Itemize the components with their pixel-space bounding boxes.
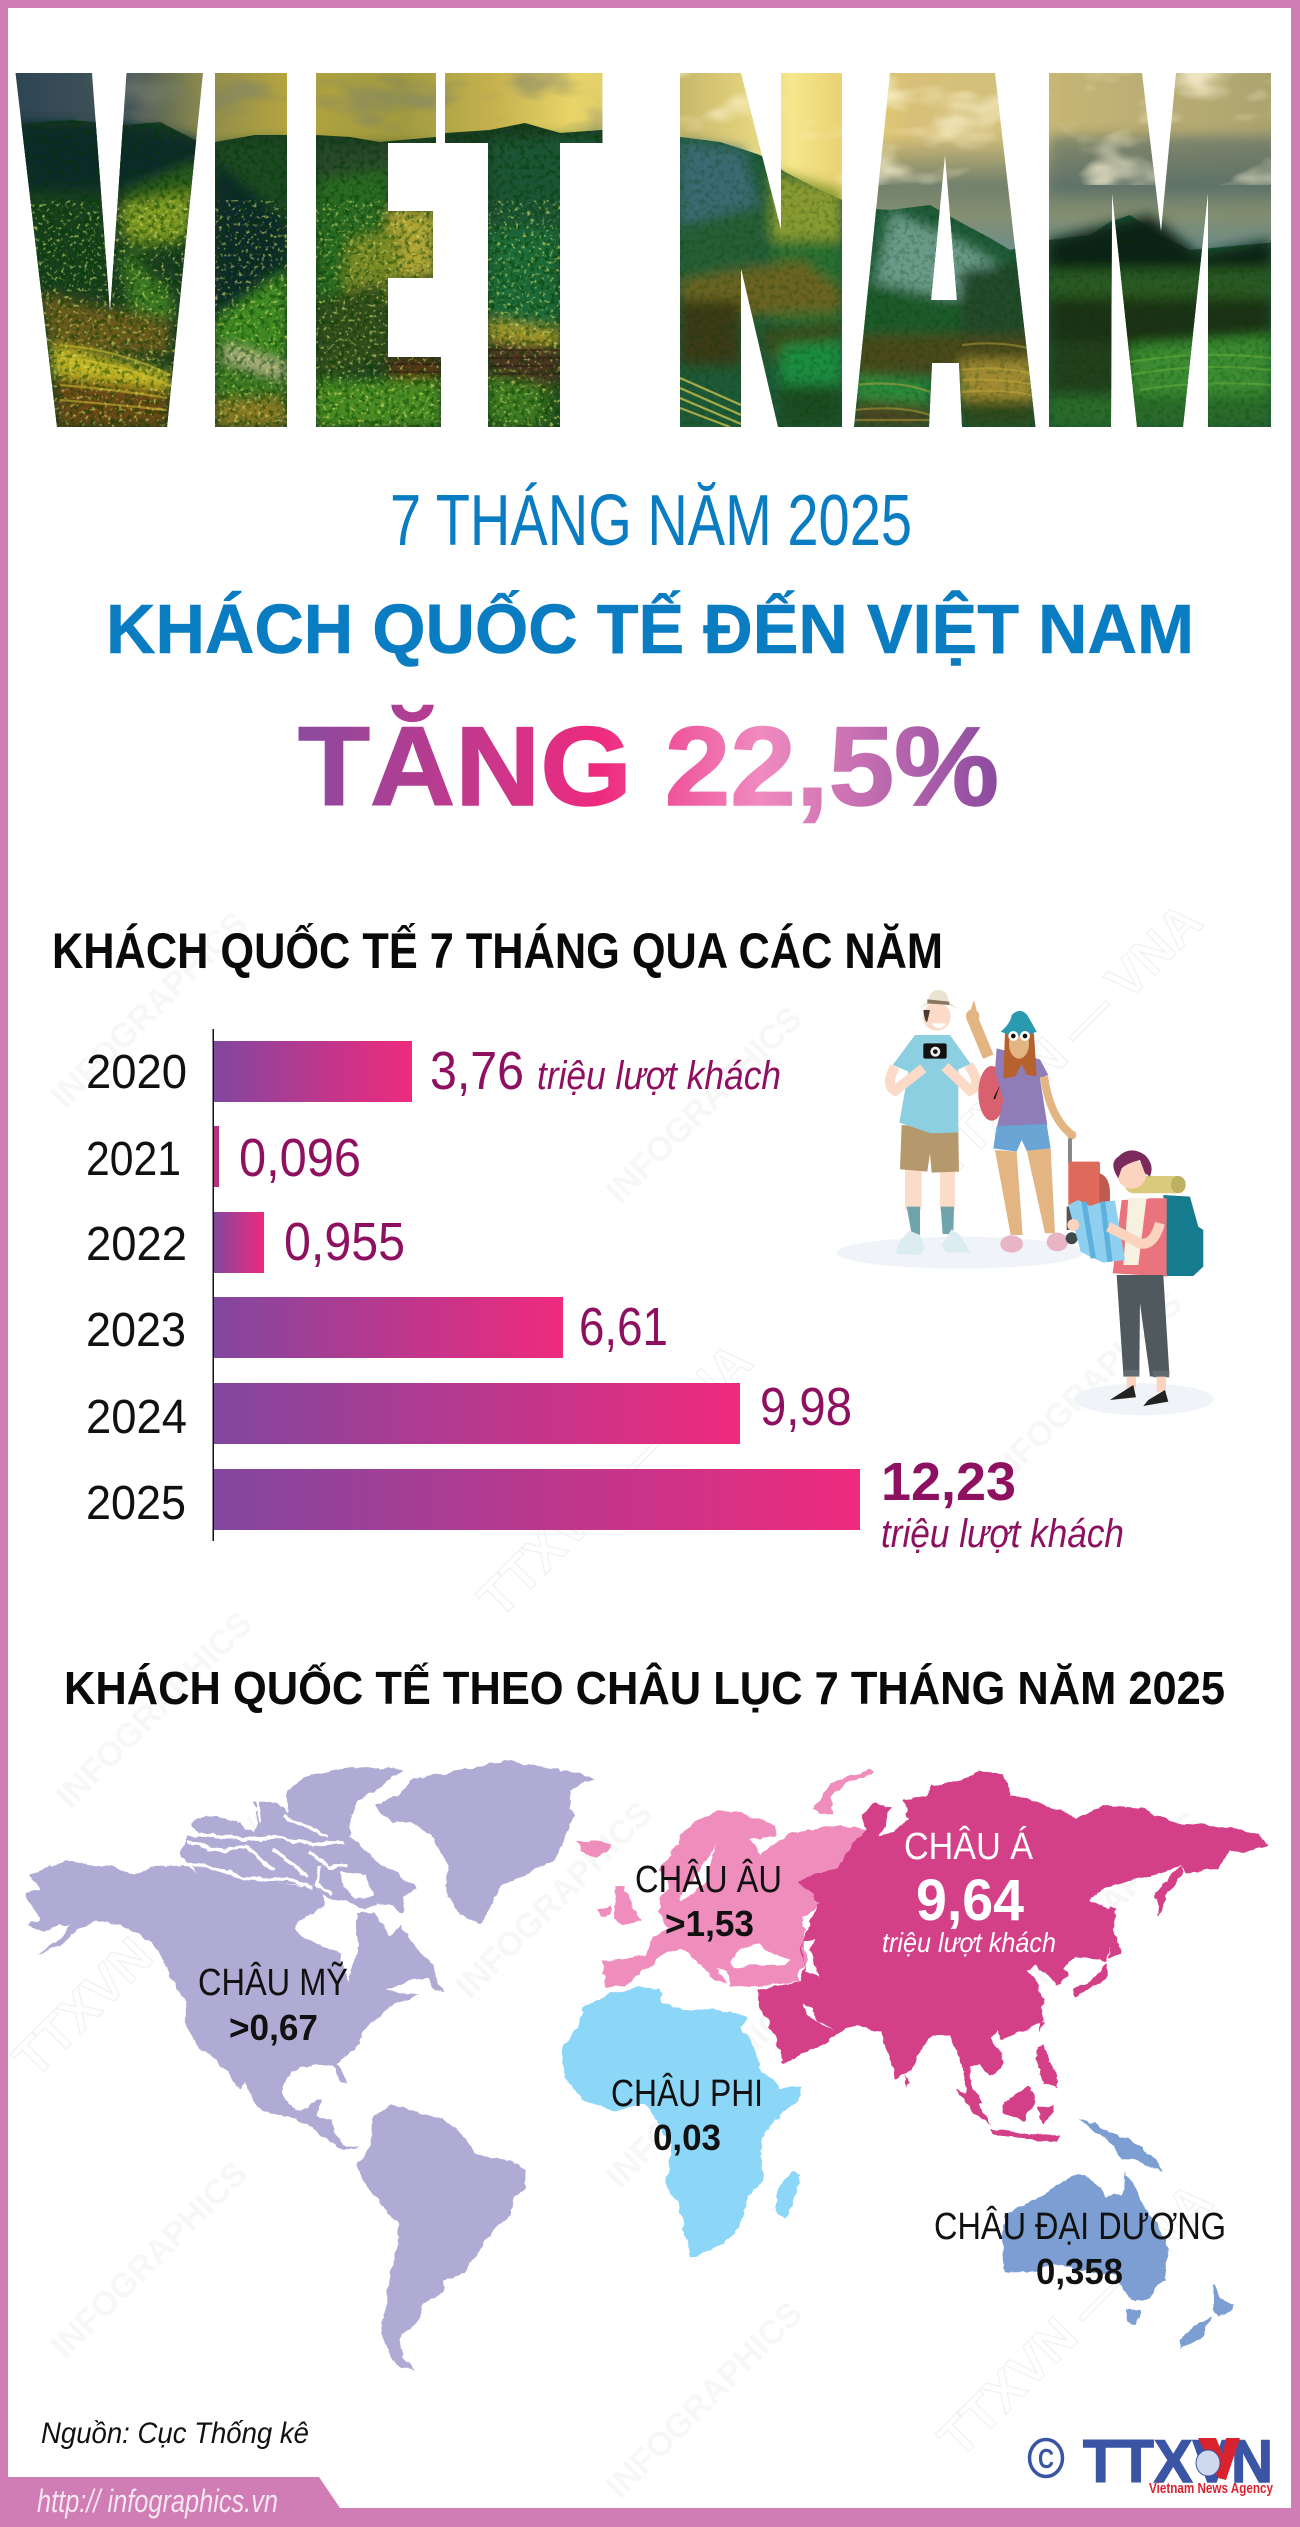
- bar 2024: [86, 1377, 852, 1444]
- label: Châu Mỹ: CHÂU MỸ: [198, 1961, 348, 2004]
- bar 2021: 0,096: [239, 1128, 361, 1188]
- watermarks: TTXVN — VNA: [927, 2172, 1224, 2468]
- label: Châu Đại Dương: 0,358: [1036, 2251, 1123, 2292]
- icon: copyright: C: [1038, 2443, 1054, 2474]
- bar 2021: 2021: [86, 1133, 181, 1186]
- label: Châu Đại Dương: CHÂU ĐẠI DƯƠNG: [934, 2205, 1226, 2248]
- headline: tăng 22,5%: TĂNG 22,5%: [298, 704, 999, 829]
- icon: copyright: [1030, 2440, 1062, 2476]
- title: VIET NAM letters filled with landscape: [16, 73, 1271, 427]
- watermarks: TTXVN — VNA: [2, 1792, 299, 2088]
- watermarks: INFOGRAPHICS: [44, 904, 255, 1116]
- label: Châu Âu: >1,53: [665, 1903, 754, 1944]
- label: Châu Á: CHÂU Á: [904, 1825, 1034, 1868]
- bar 2020: 3,76: [430, 1041, 524, 1101]
- watermarks: INFOGRAPHICS: [49, 1604, 260, 1816]
- watermarks: INFOGRAPHICS: [44, 2154, 255, 2366]
- bar chart axis: [212, 1029, 214, 1541]
- man with camera: [890, 990, 976, 1255]
- world map: [26, 1761, 1267, 2369]
- watermarks: TTXVN — VNA: [917, 892, 1214, 1188]
- suitcase: [1066, 1138, 1110, 1244]
- watermarks: INFOGRAPHICS: [999, 1804, 1210, 2016]
- bar 2025: triệu lượt khách: [881, 1512, 1124, 1556]
- bar 2022: [86, 1212, 405, 1273]
- watermarks: INFOGRAPHICS: [599, 999, 810, 1211]
- bar 2020: 2020: [86, 1046, 187, 1099]
- label: Châu Mỹ: [198, 1961, 348, 2048]
- bar 2020: [86, 1041, 781, 1102]
- bar chart: [86, 1029, 1124, 1556]
- map: Europe: [576, 1770, 873, 1987]
- woman with hat: [966, 1000, 1076, 1253]
- map: Africa: [562, 1987, 802, 2256]
- label: Châu Mỹ: >0,67: [229, 2007, 318, 2048]
- label: Châu Đại Dương: [934, 2205, 1226, 2292]
- label: Châu Phi: 0,03: [653, 2117, 721, 2158]
- map: Asia: [756, 1771, 1267, 2143]
- subtitle: 7 tháng năm 2025: 7 THÁNG NĂM 2025: [390, 481, 912, 561]
- wordmark: TTXVN: [1083, 2428, 1273, 2495]
- map: Americas and Greenland: [26, 1761, 595, 2369]
- bar 2025: 2025: [86, 1477, 186, 1530]
- watermarks: INFOGRAPHICS: [449, 1794, 660, 2006]
- label: Châu Âu: CHÂU ÂU: [635, 1858, 782, 1901]
- boy with map and backpack: [1067, 1150, 1203, 1406]
- label: Châu Phi: CHÂU PHI: [611, 2072, 763, 2115]
- bar 2023: 2023: [86, 1304, 186, 1357]
- logo: copyright and TTXVN: [1030, 2428, 1274, 2497]
- bar 2022: 0,955: [284, 1212, 405, 1272]
- label: Châu Âu: [635, 1858, 782, 1944]
- bar 2025: 12,23: [881, 1452, 1016, 1512]
- section heading: bar chart: KHÁCH QUỐC TẾ 7 THÁNG QUA CÁC NĂM: [52, 922, 943, 979]
- section heading: map: KHÁCH QUỐC TẾ THEO CHÂU LỤC 7 THÁNG NĂM 2025: [64, 1662, 1225, 1714]
- watermarks: [2, 892, 1224, 2506]
- label: Châu Á: [882, 1825, 1056, 1958]
- illustration: tourists: [837, 990, 1213, 1415]
- bar 2023: 6,61: [579, 1297, 668, 1357]
- bar 2025: [86, 1452, 1124, 1556]
- watermarks: INFOGRAPHICS: [599, 2294, 810, 2506]
- map: Oceania: [1002, 2119, 1234, 2349]
- source note: Nguồn: Cục Thống kê: [41, 2417, 309, 2450]
- bar 2024: 9,98: [760, 1377, 852, 1437]
- bar 2024: 2024: [86, 1391, 187, 1444]
- label: Châu Á: 9,64: [916, 1868, 1024, 1933]
- bar 2021: [86, 1126, 361, 1188]
- label: Châu Á: triệu lượt khách: [882, 1927, 1056, 1958]
- footer url: http:// infographics.vn: [37, 2483, 278, 2519]
- bar 2022: 2022: [86, 1218, 187, 1271]
- bar 2023: [86, 1297, 668, 1358]
- bar 2020: triệu lượt khách: [537, 1054, 781, 1098]
- watermarks: TTXVN — VNA: [467, 1332, 764, 1628]
- subtitle: khách quốc tế đến Việt Nam: KHÁCH QUỐC TẾ ĐẾN VIỆT NAM: [106, 589, 1194, 668]
- watermarks: INFOGRAPHICS: [599, 1984, 810, 2196]
- label: Châu Phi: [611, 2072, 763, 2158]
- watermarks: INFOGRAPHICS: [979, 1284, 1190, 1496]
